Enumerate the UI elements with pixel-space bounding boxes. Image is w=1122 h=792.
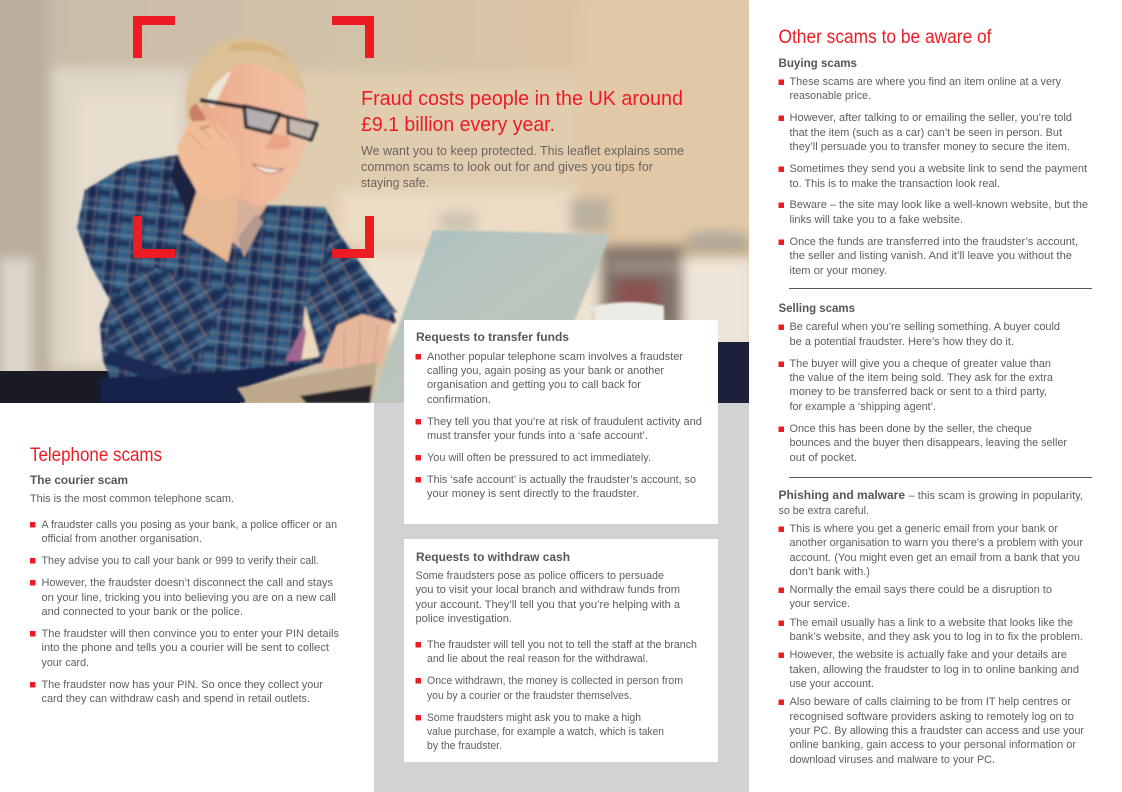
mouth bbox=[253, 164, 283, 173]
section: phishing and malware: bank’s website, and they ask you to log in to fix the problem. bbox=[790, 631, 1083, 643]
section: buying scams: These scams are where you find an item online at a very bbox=[790, 76, 1061, 88]
section: phishing and malware: use your account. bbox=[790, 678, 874, 690]
section: buying scams: reasonable price. bbox=[790, 90, 871, 102]
intro line: This is the most common telephone scam. bbox=[30, 493, 234, 505]
glasses bbox=[200, 100, 243, 107]
section: buying scams: that the item (such as a car) can’t be seen in person. But bbox=[790, 127, 1062, 139]
intro paragraph: Some fraudsters pose as police officers to persuade bbox=[416, 570, 664, 582]
bullet list: withdraw cash: Once withdrawn, the money is collected in person from bbox=[427, 675, 683, 687]
bullet list: courier scam: A fraudster calls you posing as your bank, a police officer or an bbox=[42, 519, 337, 531]
section: phishing and malware: The email usually has a link to a website that looks like the bbox=[790, 617, 1073, 629]
section: selling scams bbox=[778, 301, 1067, 464]
section: phishing and malware: another organisation to warn you there’s a problem with your bbox=[790, 537, 1083, 549]
subheading: buying scams: Buying scams bbox=[778, 56, 857, 70]
corner brackets bbox=[133, 16, 374, 258]
heading: other scams: Other scams to be aware of bbox=[778, 27, 992, 48]
bullet list: transfer funds: organisation and getting you to call back for bbox=[427, 379, 641, 391]
section: buying scams: to. This is to make the transaction look real. bbox=[790, 178, 1000, 190]
bullet list: withdraw cash bbox=[416, 639, 697, 752]
intro paragraph: you to visit your local branch and withdraw funds from bbox=[416, 584, 680, 596]
ear bbox=[190, 103, 206, 126]
fist bbox=[178, 121, 241, 200]
intro paragraph: your account. They’ll tell you that you’re helping with a bbox=[416, 599, 681, 611]
mug bbox=[586, 300, 666, 320]
subheading: phishing and malware: Phishing and malware bbox=[778, 488, 905, 502]
section: phishing and malware bbox=[778, 488, 1084, 766]
section: buying scams: However, after talking to or emailing the seller, you’re told bbox=[790, 112, 1072, 124]
bullet list: courier scam: The fraudster will then convince you to enter your PIN details bbox=[42, 628, 339, 640]
section: selling scams: bounces and the buyer then disappears, leaving the seller bbox=[790, 437, 1067, 449]
bullet list: withdraw cash: you by a courier or the fraudster themselves. bbox=[427, 690, 632, 702]
section: buying scams: the seller and listing vanish. And it’ll leave you without the bbox=[790, 250, 1072, 262]
section: phishing and malware: recognised software providers asking to remotely log on to bbox=[790, 711, 1074, 723]
section: phishing and malware: However, the website is actually fake and your details are bbox=[790, 649, 1067, 661]
bullet list: courier scam: into the phone and tells you a courier will be sent to collect bbox=[42, 642, 329, 654]
bullet list: courier scam bbox=[30, 519, 339, 705]
section: phishing and malware: taken, allowing the fraudster to log in to online banking and bbox=[790, 664, 1079, 676]
bullet list: withdraw cash: The fraudster will tell you not to tell the staff at the branch bbox=[427, 639, 697, 651]
lower dark torso bbox=[100, 362, 320, 403]
photo background: kitchen bbox=[0, 0, 770, 420]
section: selling scams: The buyer will give you a cheque of greater value than bbox=[790, 358, 1051, 370]
panel: requests to withdraw cash bbox=[404, 539, 718, 762]
subheading: withdraw cash: Requests to withdraw cash bbox=[416, 550, 570, 564]
hero intro text: We want you to keep protected. This leaflet explains some bbox=[361, 143, 684, 158]
laptop bbox=[237, 230, 608, 403]
forearm bbox=[183, 186, 238, 262]
right sleeve bbox=[305, 230, 397, 357]
section: selling scams: be a potential fraudster. Here’s how they do it. bbox=[790, 336, 1014, 348]
hero intro text: staying safe. bbox=[361, 175, 429, 190]
section: phishing and malware: your PC. By allowing this a fraudster can access and use your bbox=[790, 725, 1084, 737]
panel: requests to transfer funds bbox=[404, 320, 718, 524]
bullet list: transfer funds: must transfer your funds into a ‘safe account’. bbox=[427, 430, 648, 442]
section: buying scams: Beware – the site may look like a well-known website, but the bbox=[790, 199, 1088, 211]
intro paragraph bbox=[416, 570, 681, 625]
bullet list: courier scam: your card. bbox=[42, 657, 89, 669]
section: phishing and malware: so be extra careful. bbox=[778, 505, 869, 517]
bullet list: transfer funds: You will often be pressured to act immediately. bbox=[427, 452, 651, 464]
bullet list: courier scam: However, the fraudster doesn’t disconnect the call and stays bbox=[42, 577, 333, 589]
section: phishing and malware: download viruses and malware to your PC. bbox=[790, 754, 995, 766]
hero headline: Fraud costs people in the UK around bbox=[361, 88, 683, 110]
hero intro text bbox=[361, 143, 684, 190]
section: selling scams: Once this has been done by the seller, the cheque bbox=[790, 423, 1032, 435]
hair bbox=[186, 37, 306, 122]
hero headline bbox=[361, 88, 683, 136]
table bbox=[0, 371, 240, 403]
subheading: selling scams: Selling scams bbox=[778, 301, 855, 315]
bullet list: transfer funds: your money is sent directly to the fraudster. bbox=[427, 488, 639, 500]
section: phishing and malware: – this scam is growing in popularity, bbox=[908, 490, 1083, 502]
shirt torso bbox=[77, 155, 396, 378]
right hand bbox=[320, 314, 392, 372]
section: selling scams: for example a ‘shipping agent’. bbox=[790, 401, 936, 413]
bullet list: courier scam: official from another organisation. bbox=[42, 533, 202, 545]
bullet list: transfer funds: This ‘safe account’ is actually the fraudster’s account, so bbox=[427, 474, 696, 486]
bullet list: courier scam: They advise you to call your bank or 999 to verify their call. bbox=[42, 555, 319, 567]
section: selling scams: money to be transferred back or sent to a third party, bbox=[790, 386, 1047, 398]
section: phishing and malware: online banking, gain access to your personal information or bbox=[790, 739, 1076, 751]
section: selling scams: out of pocket. bbox=[790, 452, 857, 464]
section: selling scams: the value of the item being sold. They ask for the extra bbox=[790, 372, 1054, 384]
section: phishing and malware: account. (You might even get an email from a bank that you bbox=[790, 552, 1080, 564]
section: phishing and malware: your service. bbox=[790, 598, 850, 610]
rolled sleeve bbox=[108, 267, 234, 375]
bullet list: courier scam: The fraudster now has your PIN. So once they collect your bbox=[42, 679, 323, 691]
section: buying scams: item or your money. bbox=[790, 265, 887, 277]
hero headline: £9.1 billion every year. bbox=[361, 114, 555, 136]
bullet list: courier scam: and connected to your bank or the police. bbox=[42, 606, 243, 618]
subheading: transfer funds: Requests to transfer funds bbox=[416, 330, 569, 344]
bullet list: withdraw cash: and lie about the real reason for the withdrawal. bbox=[427, 653, 648, 665]
bullet list: transfer funds bbox=[416, 351, 702, 500]
gap and tie-coloured undershirt bbox=[300, 304, 321, 362]
bullet list: transfer funds: calling you, again posing as your bank or another bbox=[427, 365, 664, 377]
bullet list: transfer funds: They tell you that you’re at risk of fraudulent activity and bbox=[427, 416, 702, 428]
intro paragraph: police investigation. bbox=[416, 613, 512, 625]
bullet list: transfer funds: Another popular telephone scam involves a fraudster bbox=[427, 351, 683, 363]
section: phishing and malware: Also beware of calls claiming to be from IT help centres or bbox=[790, 696, 1071, 708]
section: buying scams bbox=[778, 56, 1088, 277]
grey background band bbox=[374, 403, 749, 792]
neck and collar gap bbox=[232, 198, 268, 248]
bullet list: withdraw cash: value purchase, for example a watch, which is taken bbox=[427, 726, 664, 738]
subheading: the courier scam: The courier scam bbox=[30, 473, 128, 487]
section: phishing and malware: don’t bank with.) bbox=[790, 566, 870, 578]
man bbox=[77, 37, 397, 403]
section: phishing and malware: This is where you get a generic email from your bank or bbox=[790, 523, 1058, 535]
section: buying scams: they’ll persuade you to transfer money to secure the item. bbox=[790, 141, 1070, 153]
bullet list: courier scam: card they can withdraw cash and spend in retail outlets. bbox=[42, 693, 310, 705]
hero photo: man at laptop in kitchen bbox=[0, 0, 770, 420]
section: phishing and malware: Normally the email says there could be a disruption to bbox=[790, 584, 1052, 596]
section: buying scams: Sometimes they send you a website link to send the payment bbox=[790, 163, 1087, 175]
hero intro text: common scams to look out for and gives you tips for bbox=[361, 159, 654, 174]
bullet list: courier scam: on your line, tricking you into believing you are on a new call bbox=[42, 592, 336, 604]
section: buying scams: links will take you to a fake website. bbox=[790, 214, 963, 226]
bullet list: withdraw cash: Some fraudsters might ask you to make a high bbox=[427, 712, 641, 724]
section: selling scams: Be careful when you’re selling something. A buyer could bbox=[790, 321, 1060, 333]
bullet list: withdraw cash: by the fraudster. bbox=[427, 740, 502, 752]
nose bbox=[265, 134, 291, 150]
heading: telephone scams: Telephone scams bbox=[30, 445, 162, 466]
panel: other scams bbox=[778, 27, 1092, 766]
panel: telephone scams bbox=[30, 445, 339, 705]
section: buying scams: Once the funds are transferred into the fraudster’s account, bbox=[790, 236, 1078, 248]
bullet list: transfer funds: confirmation. bbox=[427, 394, 491, 406]
head bbox=[200, 63, 309, 207]
